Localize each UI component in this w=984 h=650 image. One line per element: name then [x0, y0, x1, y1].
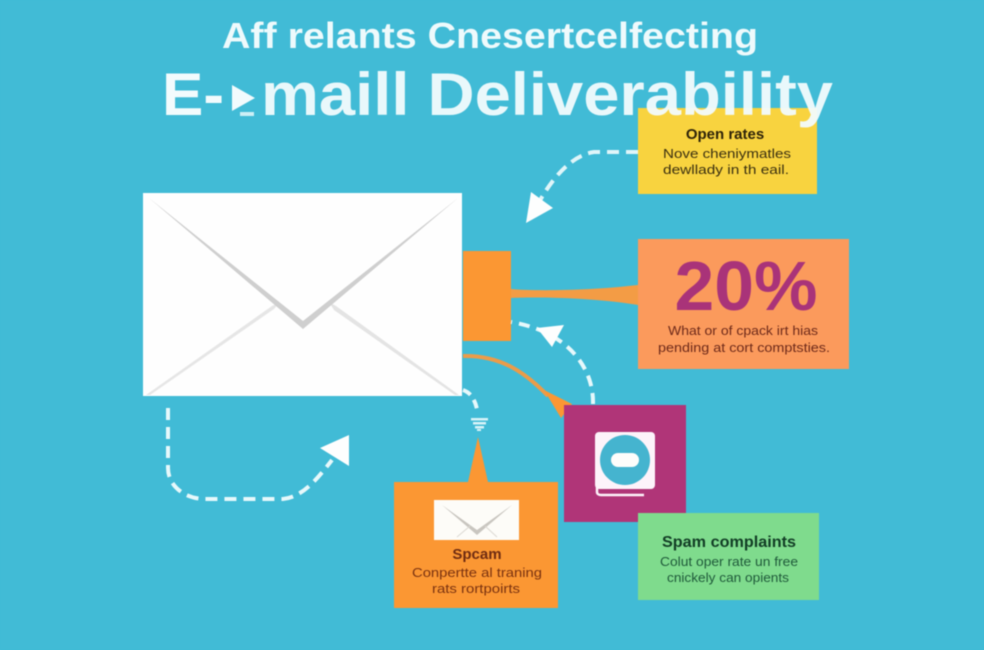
panel: spam complaints: [638, 513, 819, 600]
icon: small funnel marker: [471, 418, 488, 431]
panel: 20% statistic: What or of cpack irt hias: [668, 324, 818, 338]
panel: 20% statistic: 20%: [674, 247, 818, 325]
title: Aff relants Cnesertcelfecting: [222, 15, 758, 56]
panel: spam complaints: Colut oper rate un free: [660, 555, 798, 569]
panel: spam: Spcam: [452, 546, 502, 563]
panel: open rates: Nove cheniymatles: [663, 147, 791, 161]
panel: purple icon tile: [564, 405, 686, 522]
arrow: purple panel back to orange tab: [511, 322, 593, 404]
title: maill Deliverability: [261, 61, 834, 128]
panel: open rates: dewllady in th eail.: [663, 163, 789, 177]
panel: 20% statistic: pending at cort comptsties.: [658, 341, 830, 355]
icon: small envelope: [434, 500, 519, 540]
panel: open rates: [638, 108, 817, 194]
title: [162, 15, 834, 128]
arrow: dashed loop below envelope: [168, 408, 349, 499]
icon: rounded device with minus sign: [595, 432, 655, 495]
panel: spam: Conpertte al traning: [412, 566, 542, 580]
panel: spam: [394, 437, 558, 608]
panel: open rates: Open rates: [686, 126, 764, 143]
arrow: short dashed link from envelope to spam marker: [463, 390, 478, 414]
title: E-: [162, 61, 224, 128]
panel: spam complaints: cnickely can opients: [667, 571, 789, 585]
panel: spam complaints: Spam complaints: [662, 534, 796, 551]
panel: spam: rats rortpoirts: [432, 582, 520, 596]
connector: orange curve from envelope to purple panel: [463, 356, 572, 418]
icon: large white envelope: [143, 193, 462, 396]
arrow: open rates to envelope: [526, 152, 638, 223]
connector: orange tab to 20% panel: [463, 251, 638, 341]
panel: 20% statistic: [638, 239, 849, 369]
